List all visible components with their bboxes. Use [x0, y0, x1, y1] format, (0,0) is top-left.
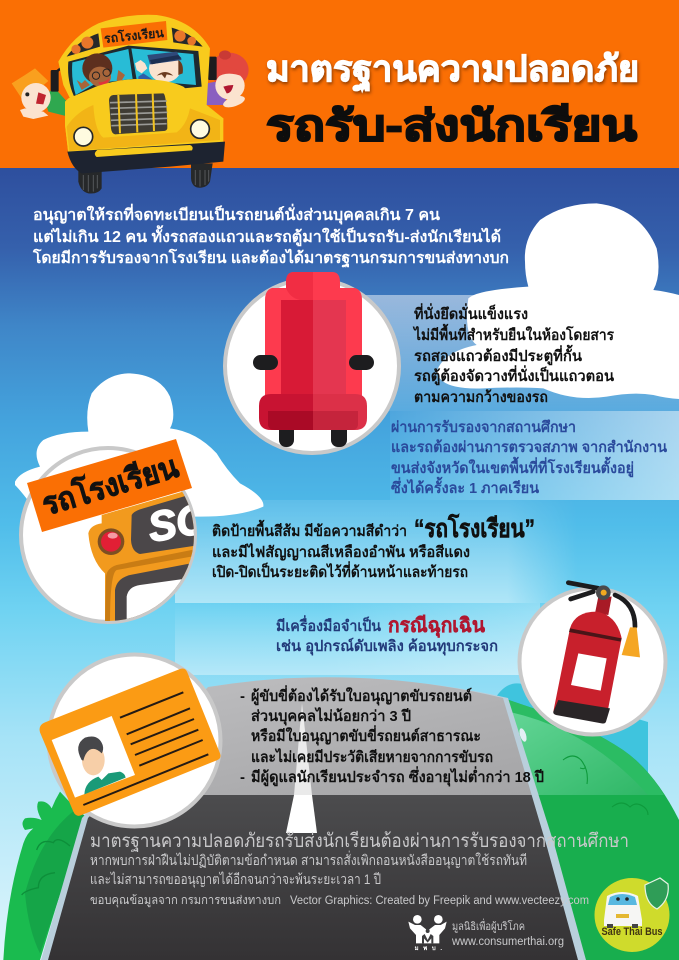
footer text: และไม่สามารถขออนุญาตได้อีกจนกว่าจะพ้นระยะเวลา 1 ปี: [90, 871, 381, 888]
title: มาตรฐานความปลอดภัย: [266, 48, 639, 92]
left child: [12, 68, 70, 119]
circle: school bus sign icon: [21, 439, 211, 623]
windshield: [68, 46, 202, 98]
right child: [203, 50, 249, 110]
driver requirements text: -: [240, 688, 245, 705]
headlights: [74, 120, 209, 146]
hill: left: [3, 792, 87, 960]
seat illustration: [253, 272, 374, 447]
footer text: ขอบคุณข้อมูลจาก กรมการขนส่งทางบก: [90, 893, 281, 908]
bus rear illustration: [88, 492, 194, 621]
foundation name: มูลนิธิเพื่อผู้บริโภค: [452, 918, 525, 933]
seat requirements text: ที่นั่งยึดมั่นแข็งแรง: [414, 303, 528, 323]
sign requirements text: เปิด-ปิดเป็นระยะติดไว้ที่ด้านหน้าและท้ายรถ: [212, 561, 468, 581]
footer text: หากพบการฝ่าฝืนไม่ปฏิบัติตามข้อกำหนด สามารถสั่งเพิกถอนหนังสืออนุญาตใช้รถทันที: [90, 851, 527, 869]
road: [41, 677, 586, 960]
intro text: อนุญาตให้รถที่จดทะเบียนเป็นรถยนต์นั่งส่วนบุคคลเกิน 7 คน: [33, 203, 440, 225]
emergency equipment text: มีเครื่องมือจำเป็น: [276, 615, 382, 635]
footer text: Vector Graphics: Created by Freepik and www.vecteezy.com: [290, 895, 589, 907]
sign requirements text: ติดป้ายพื้นสีส้ม มีข้อความสีดำว่า: [212, 519, 407, 540]
roof lights: [67, 28, 203, 57]
safe thai bus badge: [594, 878, 670, 952]
orange sign: รถโรงเรียน: [38, 448, 182, 522]
teal hill behind the road: [493, 683, 648, 800]
hood: [65, 79, 223, 153]
driver requirements text: [240, 685, 544, 787]
grille: [109, 93, 167, 134]
inspection text: ซึ่งได้ครั้งละ 1 ภาคเรียน: [391, 476, 540, 497]
driver in windshield: [135, 52, 183, 82]
header band: [0, 0, 679, 168]
circle: seat icon: [225, 272, 399, 453]
inspection text: ผ่านการรับรองจากสถานศึกษา: [391, 418, 576, 436]
safe thai bus badge: Safe Thai Bus: [602, 926, 662, 938]
intro text: [32, 203, 509, 268]
licence card illustration: [40, 668, 221, 816]
foundation logo: มพบ.: [415, 945, 442, 952]
bumper: [67, 142, 225, 173]
sign requirements text: และมีไฟสัญญาณสีเหลืองอำพัน หรือสีแดง: [212, 542, 470, 561]
inspection text: [391, 418, 668, 497]
seat requirements text: รถสองแถวต้องมีประตูที่กั้น: [414, 344, 583, 366]
driver requirements text: -: [240, 769, 245, 786]
translucent panel bands: [175, 295, 679, 675]
cloud: top right: [437, 203, 679, 399]
inspection text: และรถต้องผ่านการตรวจสภาพ จากสำนักงาน: [391, 439, 668, 456]
mirrors: [51, 57, 217, 92]
inspection text: ขนส่งจังหวัดในเขตพื้นที่ที่โรงเรียนตั้งอยู่: [391, 456, 634, 478]
driver requirements text: มีผู้ดูแลนักเรียนประจำรถ ซึ่งอายุไม่ต่ำกว่า 18 ปี: [251, 766, 544, 787]
foundation name: [451, 918, 564, 948]
hill: right: [500, 698, 679, 960]
driver requirements text: ผู้ขับขี่ต้องได้รับใบอนุญาตขับรถยนต์: [251, 685, 472, 706]
seat requirements text: ไม่มีพื้นที่สำหรับยืนในห้องโดยสาร: [412, 323, 615, 344]
sign requirements text: [212, 513, 535, 581]
circle: driver licence icon: [40, 654, 221, 826]
foundation logo: [408, 915, 447, 952]
seat requirements text: รถตู้ต้องจัดวางที่นั่งเป็นแถวตอน: [414, 365, 615, 386]
intro text: โดยมีการรับรองจากโรงเรียน และต้องได้มาตรฐานกรมการขนส่งทางบก: [32, 248, 509, 268]
emergency equipment text: [276, 614, 498, 656]
seat requirements text: [412, 303, 615, 406]
driver requirements text: หรือมีใบอนุญาตขับขี่รถยนต์สาธารณะ: [251, 725, 481, 746]
child in windshield: [77, 53, 125, 90]
school bus illustration: [12, 15, 249, 193]
driver requirements text: ส่วนบุคคลไม่น้อยกว่า 3 ปี: [251, 706, 411, 726]
cloud: left: [15, 373, 263, 517]
emergency equipment text: กรณีฉุกเฉิน: [388, 614, 485, 638]
intro text: แต่ไม่เกิน 12 คน ทั้งรถสองแถวและรถตู้มาใช้เป็นรถรับ-ส่งนักเรียนได้: [33, 225, 501, 248]
emergency equipment text: เช่น อุปกรณ์ดับเพลิง ค้อนทุบกระจก: [276, 637, 498, 656]
sign requirements text: “รถโรงเรียน”: [414, 513, 535, 543]
title: รถรับ-ส่งนักเรียน: [266, 102, 637, 149]
wheels: [78, 163, 213, 193]
extinguisher illustration: [553, 583, 640, 723]
seat requirements text: ตามความกว้างของรถ: [414, 389, 548, 406]
footer text: [90, 830, 629, 908]
foundation name: www.consumerthai.org: [451, 936, 564, 948]
bus body: [58, 15, 223, 153]
circle: fire extinguisher icon: [520, 583, 666, 734]
bus sign: รถโรงเรียน: [103, 24, 165, 46]
title: [266, 48, 639, 149]
driver requirements text: และไม่เคยมีประวัติเสียหายจากการขับรถ: [251, 747, 493, 766]
bus rear illustration: SC: [144, 494, 211, 551]
